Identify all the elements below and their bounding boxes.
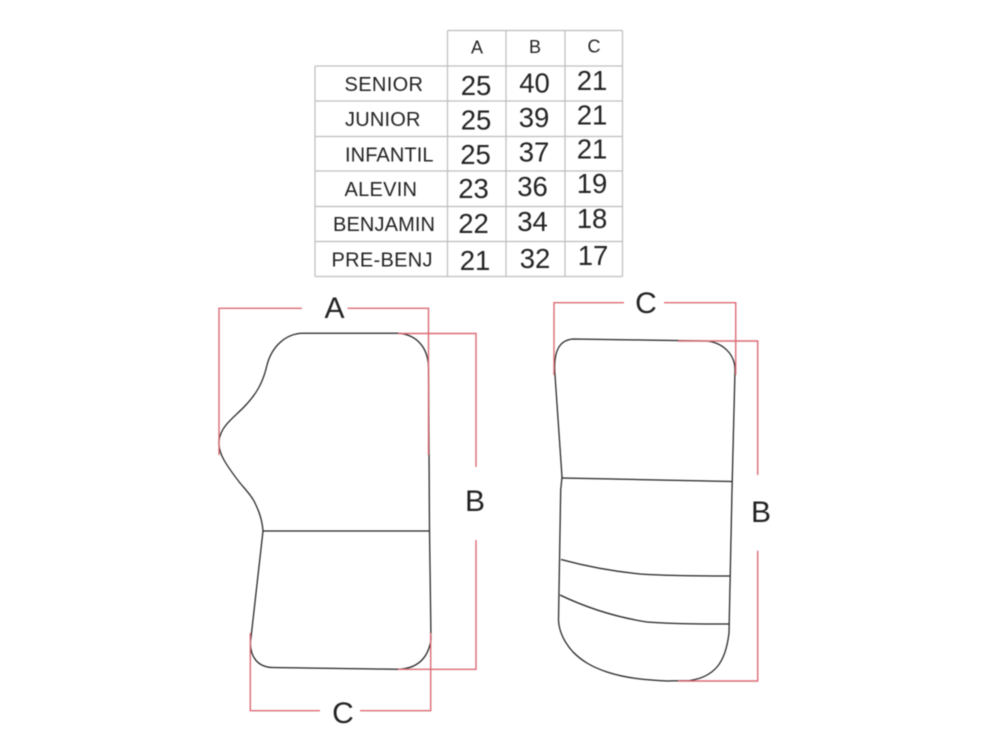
- size values: 19: [577, 168, 607, 199]
- left glove labels: C: [332, 697, 354, 730]
- right glove outline: [555, 339, 735, 681]
- size table: [315, 30, 622, 276]
- size values: 17: [578, 240, 608, 271]
- right glove labels: [635, 287, 771, 529]
- size values: 25: [461, 104, 491, 136]
- left glove labels: A: [324, 292, 345, 325]
- column headers: B: [529, 37, 541, 57]
- right glove dimension lines: [554, 303, 758, 681]
- row labels: INFANTIL: [345, 144, 434, 166]
- row labels: SENIOR: [344, 74, 423, 96]
- size values: 39: [519, 102, 549, 133]
- row labels: PRE-BENJ: [332, 250, 432, 272]
- column headers: [471, 36, 600, 58]
- column headers: A: [471, 38, 483, 58]
- size values: 25: [460, 139, 491, 170]
- right glove labels: B: [751, 496, 771, 529]
- left glove outline: [219, 333, 431, 669]
- size values: 18: [577, 203, 607, 234]
- left glove labels: [324, 292, 485, 730]
- row labels: ALEVIN: [344, 179, 417, 201]
- right glove labels: C: [635, 287, 657, 320]
- size values: 23: [458, 173, 489, 204]
- size values: 40: [519, 68, 550, 98]
- size values: 21: [577, 134, 607, 164]
- row labels: [332, 74, 435, 272]
- size values: 22: [458, 208, 489, 239]
- size values: 21: [577, 65, 607, 96]
- size values: 21: [577, 100, 607, 130]
- size values: 34: [517, 206, 548, 237]
- size values: 37: [519, 136, 549, 168]
- column headers: C: [588, 36, 600, 56]
- left glove labels: B: [465, 485, 485, 518]
- size values: 36: [517, 171, 548, 202]
- row labels: JUNIOR: [345, 109, 420, 131]
- size values: 32: [520, 243, 550, 274]
- size values: 25: [461, 70, 491, 101]
- size values: 21: [460, 245, 490, 276]
- left glove dimension lines: [219, 308, 476, 711]
- row labels: BENJAMIN: [333, 214, 435, 236]
- size values: [458, 65, 608, 276]
